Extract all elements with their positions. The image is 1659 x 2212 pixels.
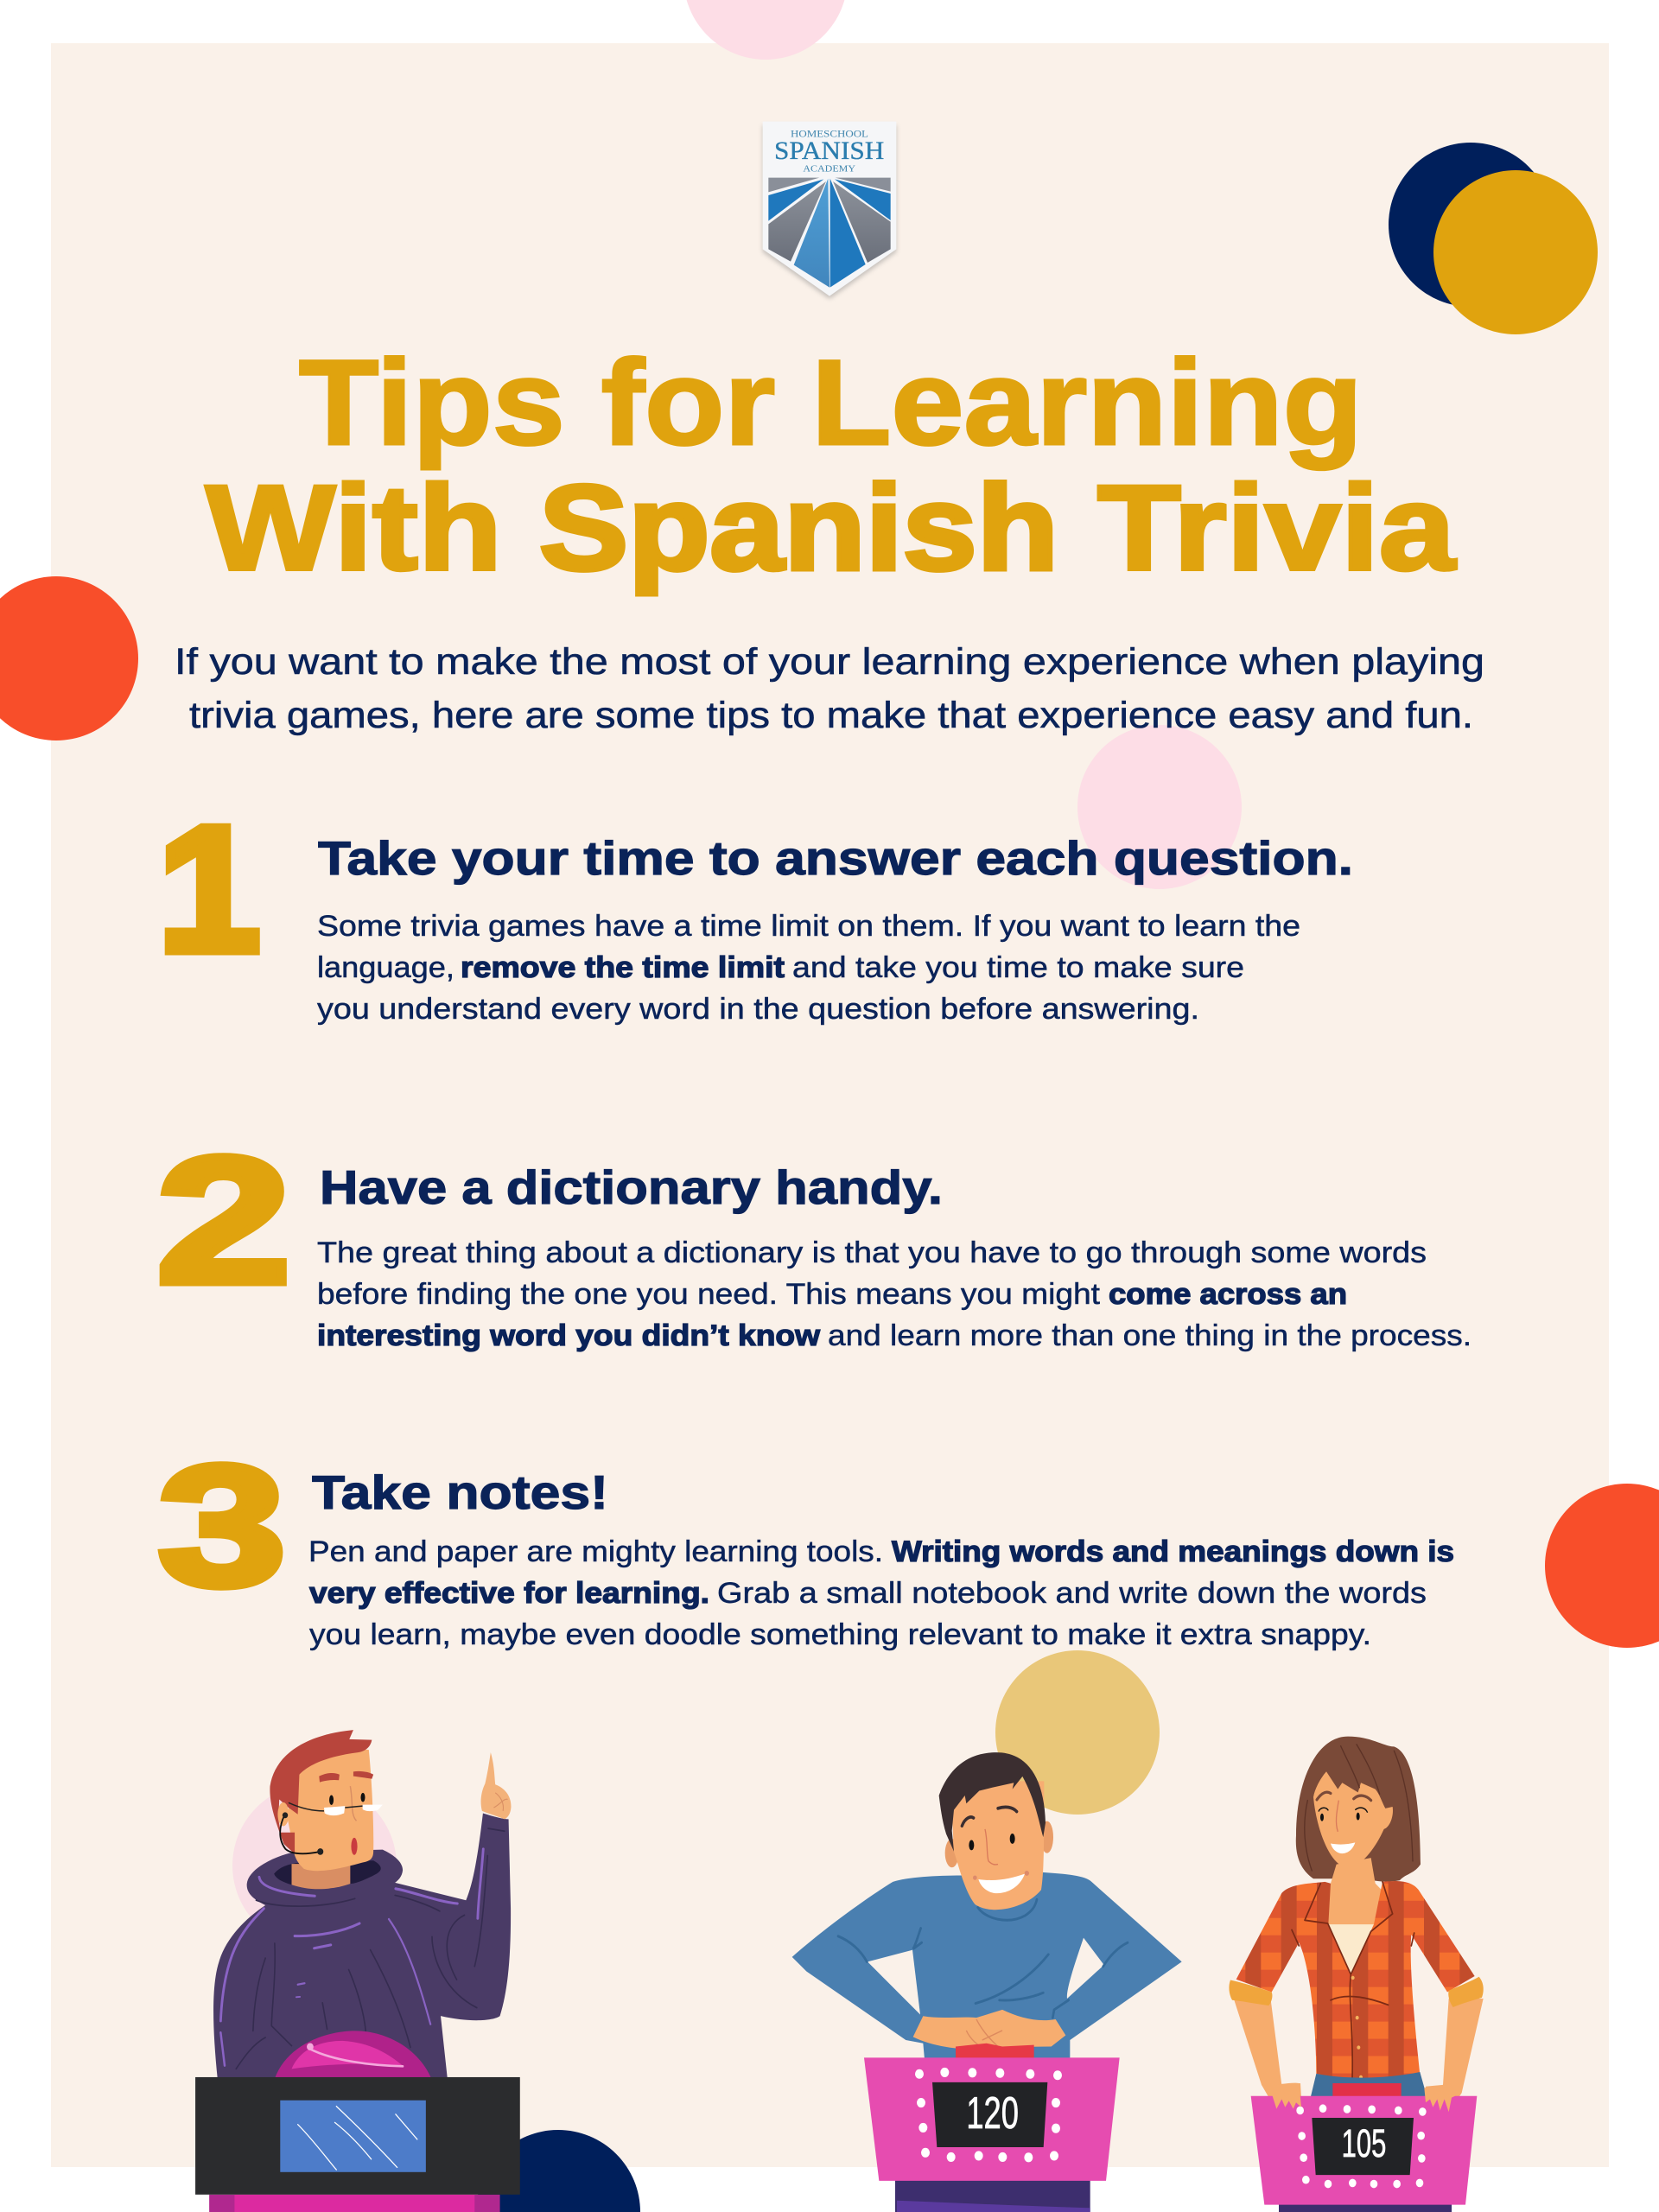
podium base <box>209 2195 500 2212</box>
shirt <box>792 1872 1182 2059</box>
tip 1 body <box>317 910 1300 1026</box>
tip 2 body: come across an <box>1109 1278 1347 1311</box>
illustration: quiz host at podium <box>195 1730 520 2212</box>
number 3: 3 <box>158 1430 286 1621</box>
nose <box>350 1786 356 1821</box>
tip 3 <box>158 1430 1454 1651</box>
score box <box>1251 2096 1477 2205</box>
tip 1 heading: Take your time to answer each question. <box>318 831 1353 885</box>
illustration: male contestant <box>792 1752 1182 2212</box>
jeans <box>1311 2072 1427 2098</box>
red buzzer <box>956 2044 1034 2059</box>
stand <box>895 2180 1090 2212</box>
pointing hand <box>481 1752 511 1819</box>
eyes <box>329 1795 334 1805</box>
logo: Homeschool Spanish Academy shield <box>763 122 896 299</box>
hair <box>1296 1737 1421 1882</box>
head <box>950 1781 1044 1910</box>
tip 1 body: you understand every word in the question before answering. <box>317 993 1199 1026</box>
hair <box>270 1730 372 1854</box>
left forearm <box>1234 1995 1302 2109</box>
illustration: female contestant <box>1229 1737 1484 2212</box>
arm gap right <box>1067 1938 1104 1999</box>
number 1: 1 <box>158 790 260 988</box>
brows <box>319 1771 373 1783</box>
neck and chest <box>1307 1858 1394 1929</box>
tip 3 body <box>308 1535 1454 1651</box>
nose <box>985 1829 998 1865</box>
decorative circle: pink behind host <box>232 1783 397 1948</box>
intro text: If you want to make the most of your learning experience when playing <box>175 641 1484 683</box>
score display <box>1312 2118 1414 2175</box>
screen glints <box>298 2107 417 2170</box>
podium screen <box>280 2101 426 2172</box>
tip 1 body: Some trivia games have a time limit on them. If you want to learn the <box>317 910 1300 943</box>
decorative circle: bottom navy <box>476 2130 640 2212</box>
tip 2 heading: Have a dictionary handy. <box>320 1160 943 1214</box>
glasses <box>289 1802 383 1815</box>
face <box>1313 1771 1393 1867</box>
neck <box>291 1864 350 1889</box>
tip 2 body: interesting word you didn’t know <box>317 1319 821 1352</box>
decorative circle: tan <box>995 1650 1160 1815</box>
hands <box>913 2010 1065 2050</box>
collar and placket <box>1292 1882 1414 2078</box>
brows <box>962 1807 1017 1826</box>
buttons <box>1351 1976 1363 2079</box>
hoodie folds <box>236 1828 505 2069</box>
podium black panel <box>195 2077 520 2195</box>
logo: Homeschool Spanish Academy shield: SPANISH <box>774 137 884 165</box>
ears <box>945 1821 1053 1867</box>
number 2: 2 <box>156 1121 291 1321</box>
tip 2 body: The great thing about a dictionary is that you have to go through some words <box>317 1236 1427 1269</box>
headset <box>280 1815 321 1853</box>
tip 3 body: very effective for learning. <box>309 1577 709 1610</box>
decorative circle: middle pink <box>1077 725 1242 889</box>
tip 1 body: remove the time limit <box>461 951 785 984</box>
title: Spanish <box>539 460 1058 595</box>
lights <box>915 2068 1062 2162</box>
cheeks <box>973 1871 1029 1880</box>
tip 1 body: and take you time to make sure <box>792 951 1244 984</box>
stand <box>1279 2203 1452 2212</box>
ear <box>277 1802 289 1826</box>
tip 3 body: Pen and paper are mighty learning tools. <box>308 1535 883 1568</box>
hood opening <box>274 1860 381 1885</box>
buzzer dome <box>275 2031 431 2079</box>
score box <box>864 2057 1120 2181</box>
right forearm <box>1424 1999 1484 2110</box>
score number: 120 <box>966 2088 1019 2138</box>
title: Tips for Learning <box>299 334 1363 470</box>
arm gap left <box>868 1950 920 2014</box>
tip 1 body: language, <box>317 951 454 984</box>
decorative circle: right red <box>1545 1484 1659 1648</box>
face <box>287 1750 373 1871</box>
hair <box>939 1752 1046 1852</box>
score display <box>932 2082 1047 2147</box>
red buzzer <box>1332 2083 1402 2098</box>
mouth <box>351 1838 358 1855</box>
title: Trivia <box>1097 460 1456 595</box>
logo: Homeschool Spanish Academy shield: HOMESCHOOL <box>791 130 868 140</box>
tip 2 body: and learn more than one thing in the process. <box>828 1319 1471 1352</box>
decorative circle: top pink <box>683 0 848 60</box>
smile <box>978 1874 1025 1893</box>
hoodie highlights <box>220 1849 483 2066</box>
lights <box>1296 2104 1427 2188</box>
title: With <box>206 460 502 595</box>
tip 2 <box>156 1121 1471 1352</box>
title <box>206 334 1456 595</box>
hair strands <box>1305 1745 1413 1871</box>
intro text: trivia games, here are some tips to make that experience easy and fun. <box>189 695 1473 736</box>
tip 3 body: you learn, maybe even doodle something relevant to make it extra snappy. <box>309 1618 1371 1651</box>
shirt folds <box>838 1899 1128 2018</box>
hoodie <box>213 1814 511 2079</box>
cream undershirt <box>1328 1924 1374 1974</box>
score number: 105 <box>1342 2122 1386 2166</box>
tip 3 body: Grab a small notebook and write down the words <box>717 1577 1427 1610</box>
decorative circles: navy and gold <box>1389 143 1598 334</box>
tip 2 body <box>317 1236 1471 1352</box>
tip 1 <box>158 790 1353 1026</box>
decorative circle: left red <box>0 576 138 741</box>
plaid shirt <box>1236 1881 1475 2079</box>
eyes <box>969 1840 974 1850</box>
tip 2 body: before finding the one you need. This means you might <box>317 1278 1101 1311</box>
intro text <box>175 641 1484 736</box>
hands on box <box>1262 2083 1462 2112</box>
rolled cuffs <box>1229 1977 1484 2007</box>
tip 3 body: Writing words and meanings down is <box>892 1535 1454 1568</box>
face features <box>1317 1792 1371 1853</box>
logo: Homeschool Spanish Academy shield: ACADEMY <box>803 164 855 174</box>
tip 3 heading: Take notes! <box>312 1465 608 1519</box>
